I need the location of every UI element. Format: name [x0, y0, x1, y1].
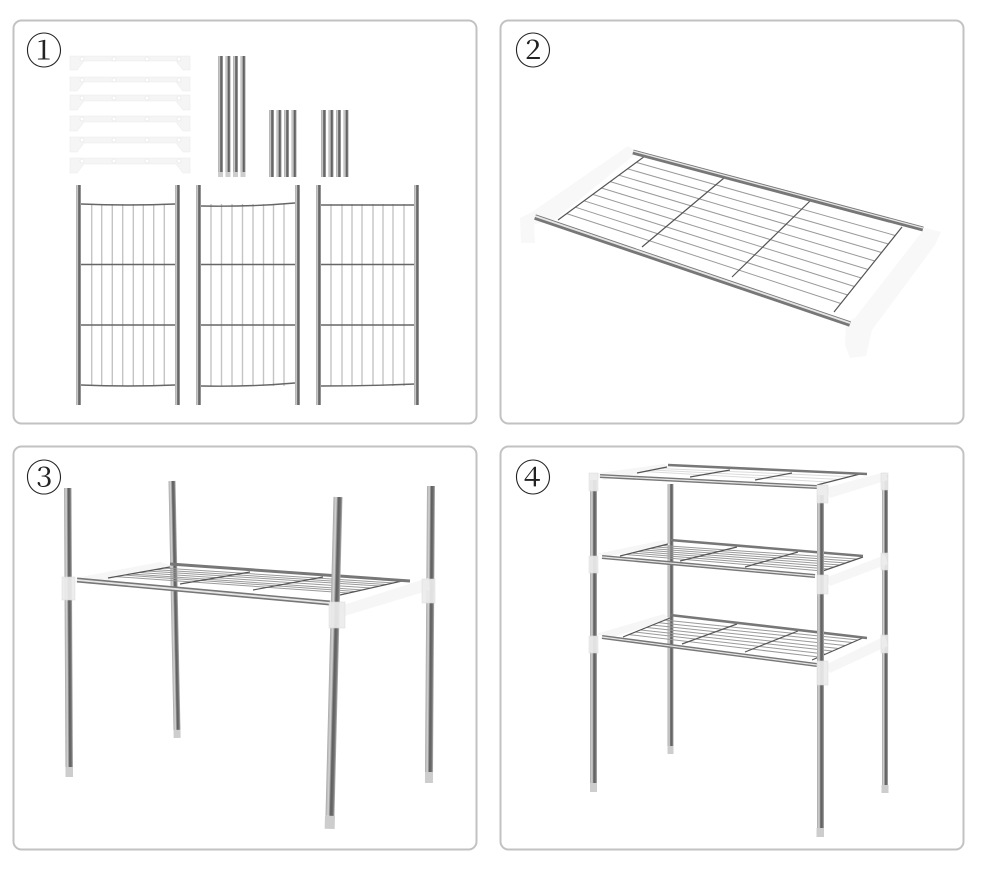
panel: step 4 three tier rack: [500, 446, 964, 850]
back poles: [668, 475, 888, 793]
panel: step 2 shelf: [500, 20, 964, 424]
back poles: [169, 481, 435, 783]
front poles: [64, 488, 343, 829]
step number 1: ①: [26, 31, 62, 73]
plastic connectors: [589, 473, 888, 685]
wire frame 2: [196, 185, 300, 405]
panel: step 1 parts: [14, 20, 476, 424]
wire frame 3: [316, 185, 419, 405]
white plastic brackets: [70, 56, 190, 173]
top shelf: [592, 464, 888, 498]
bottom shelf: [596, 614, 888, 673]
step number 2: ②: [514, 31, 552, 73]
wire frame 1: [76, 185, 180, 405]
short rods group A: [269, 110, 296, 177]
card: step 2: [500, 20, 964, 424]
front poles: [590, 480, 824, 837]
card: step 3: [14, 446, 476, 850]
card: step 1: [14, 20, 476, 424]
long rods group: [218, 56, 246, 177]
panel: step 3 one shelf on poles: [14, 446, 476, 850]
middle shelf: [596, 540, 888, 586]
shelf with plastic ends: [520, 146, 941, 358]
step number 4: ④: [514, 458, 552, 500]
card: step 4: [500, 446, 964, 850]
plastic connectors: [62, 577, 435, 628]
short rods group B: [321, 110, 348, 177]
step number 3: ③: [26, 458, 62, 500]
shelf: [75, 562, 430, 616]
